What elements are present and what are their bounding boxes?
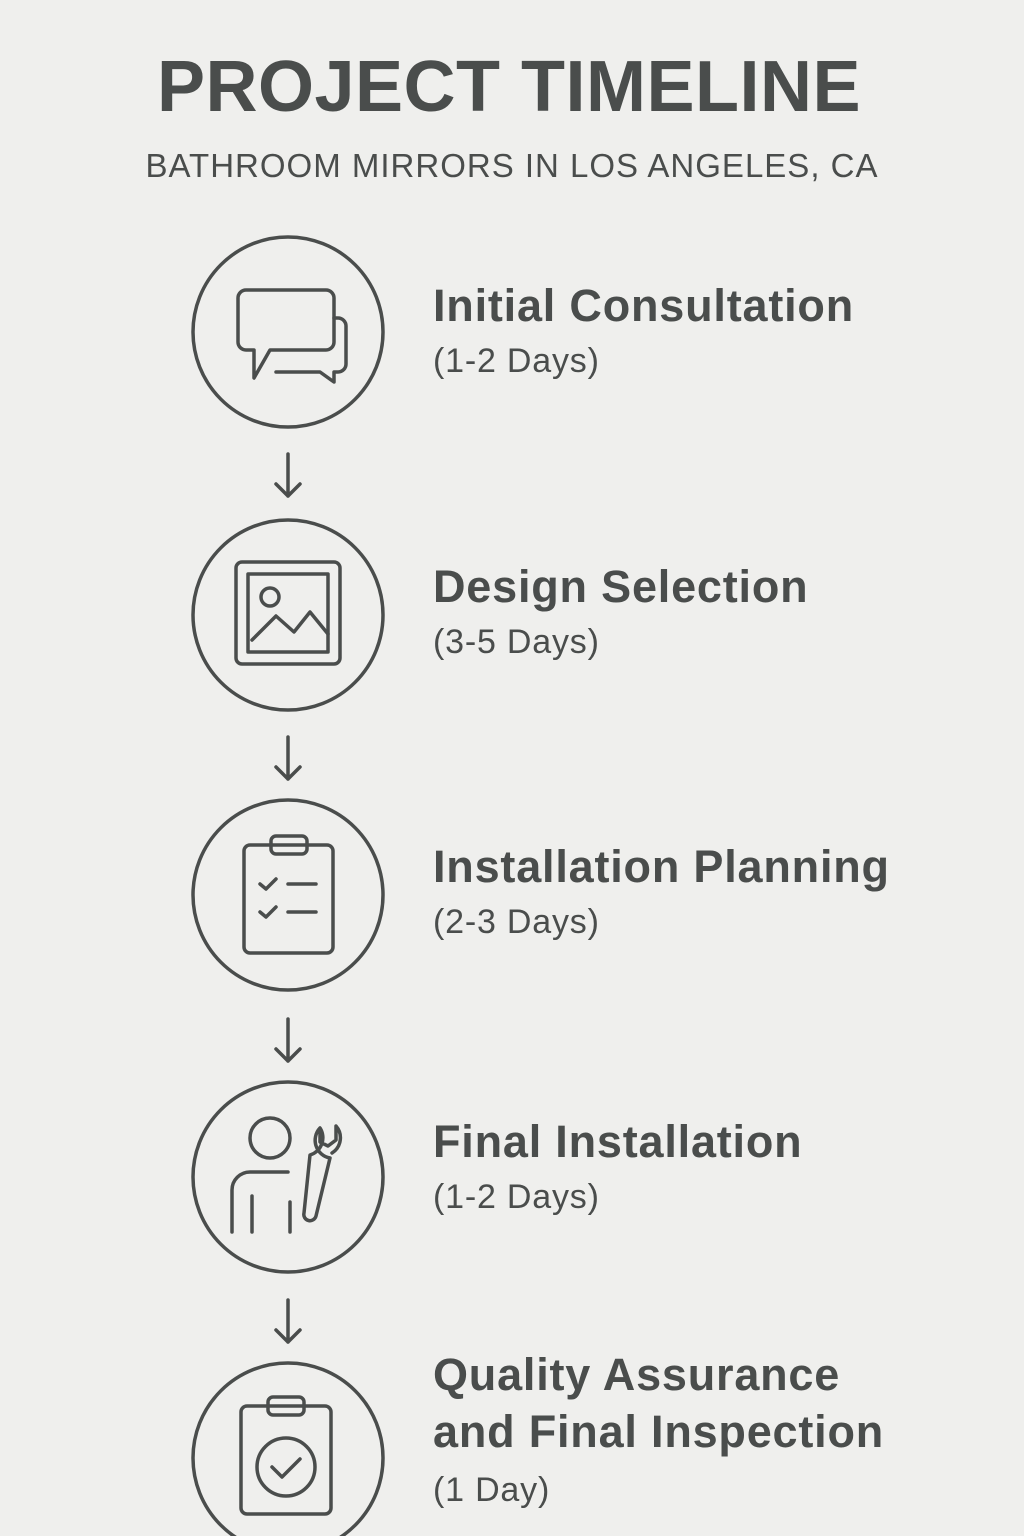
title: PROJECT TIMELINE — [157, 47, 861, 127]
step 4 text — [433, 1116, 802, 1216]
step 2 text: (3-5 Days) — [433, 623, 600, 661]
subtitle: BATHROOM MIRRORS IN LOS ANGELES, CA — [145, 147, 878, 184]
arrow 4 — [276, 1300, 300, 1342]
step 1 text — [433, 280, 854, 380]
arrow 3 — [276, 1019, 300, 1061]
step 2 text: Design Selection — [433, 561, 808, 612]
step 3 icon: clipboard checklist — [193, 800, 383, 990]
step 2 text — [433, 561, 808, 661]
step 4 text: (1-2 Days) — [433, 1178, 600, 1216]
step 1 text: Initial Consultation — [433, 280, 854, 331]
step 5 icon: clipboard check — [193, 1363, 383, 1536]
step 3 text: Installation Planning — [433, 841, 890, 892]
step 3 text — [433, 841, 890, 941]
step 2 icon: picture frame — [193, 520, 383, 710]
step 5 text: (1 Day) — [433, 1471, 550, 1509]
step 1 icon: chat bubbles — [193, 237, 383, 427]
step 3 text: (2-3 Days) — [433, 903, 600, 941]
step 4 icon: person with wrench — [193, 1082, 383, 1272]
step 5 text — [433, 1349, 884, 1509]
step 4 text: Final Installation — [433, 1116, 802, 1167]
step 5 text: Quality Assurance — [433, 1349, 840, 1400]
arrow 1 — [276, 454, 300, 496]
arrow 2 — [276, 737, 300, 779]
step 1 text: (1-2 Days) — [433, 342, 600, 380]
step 5 text: and Final Inspection — [433, 1406, 884, 1457]
